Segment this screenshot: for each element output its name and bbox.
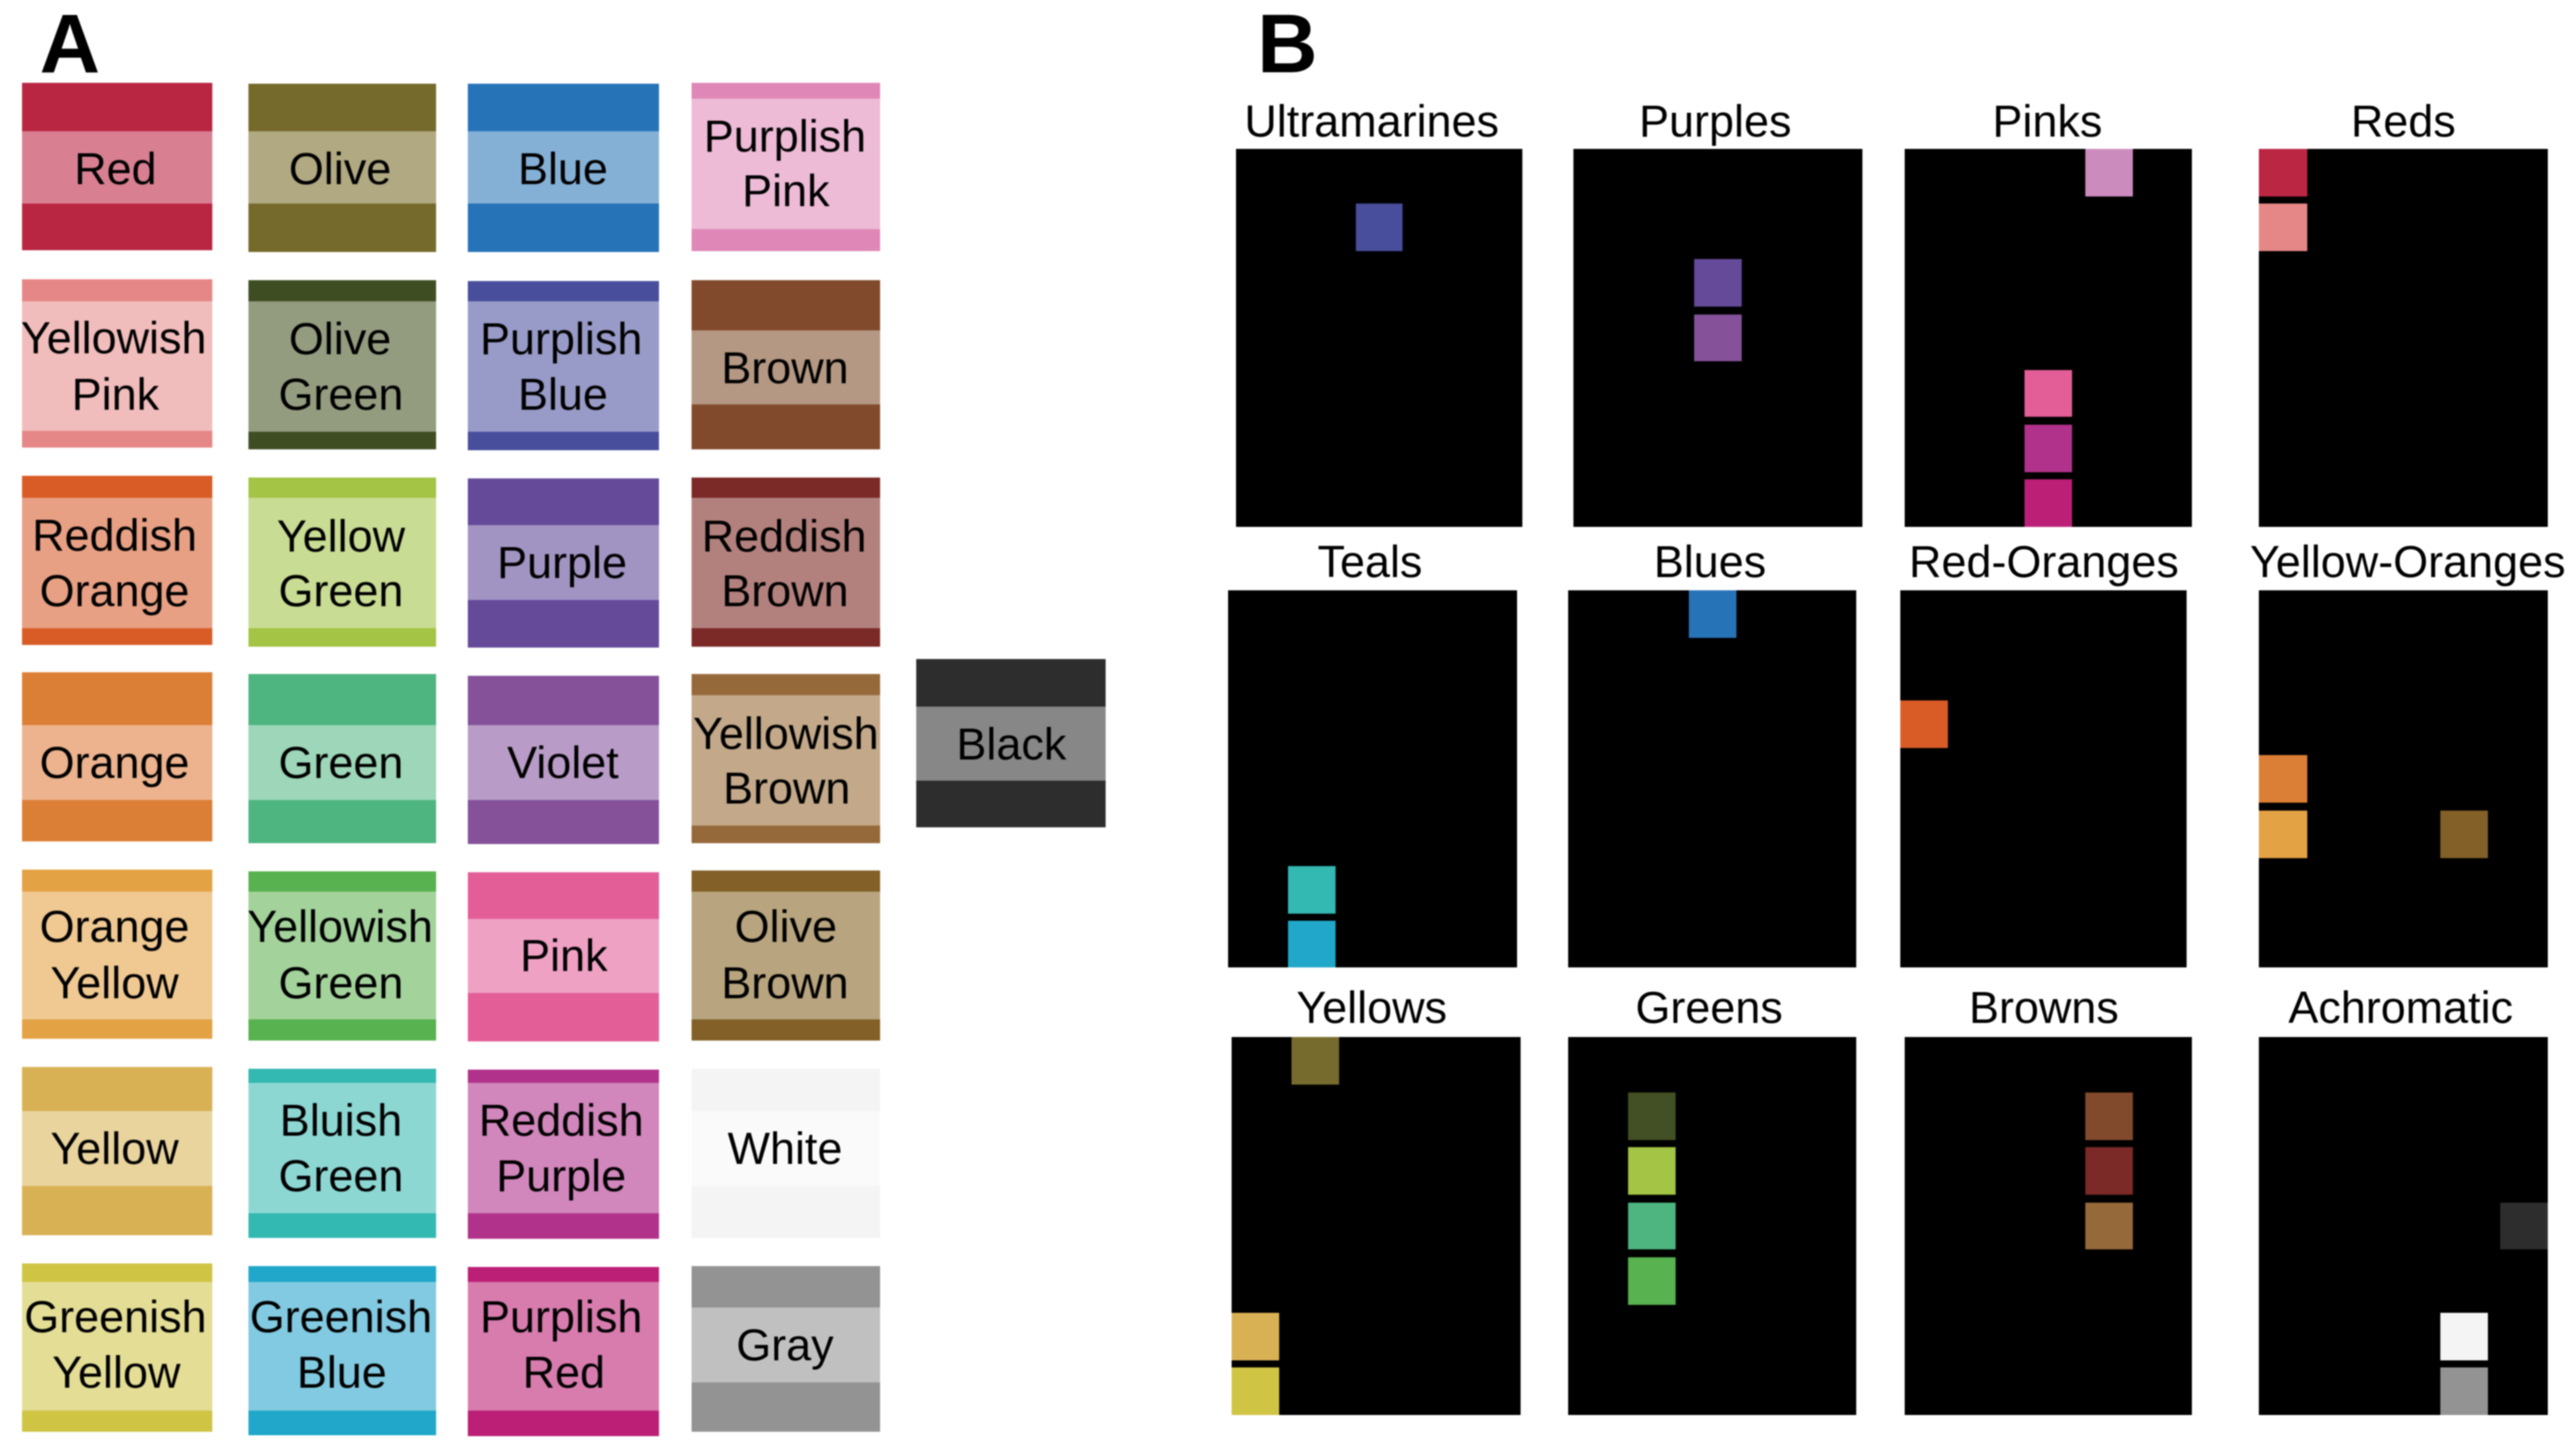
swatch: Bluish Green bbox=[248, 1069, 436, 1238]
map: Browns bbox=[1905, 982, 2192, 1415]
swatch: Green: Green bbox=[278, 737, 403, 788]
swatch: Yellow Green bbox=[248, 478, 436, 647]
swatch: Green bbox=[248, 674, 436, 843]
swatch: Black bbox=[916, 659, 1106, 827]
map: Browns: Browns bbox=[1969, 982, 2119, 1033]
swatch: Purplish Red bbox=[468, 1267, 659, 1436]
map: Teals bbox=[1228, 537, 1517, 967]
map: Purples bbox=[1573, 96, 1862, 527]
map: Yellow-Oranges: Yellow-Oranges bbox=[2250, 537, 2565, 587]
swatch: Purplish Blue: Blue bbox=[518, 369, 608, 419]
map: Blues bbox=[1568, 537, 1856, 967]
swatch: Reddish Orange bbox=[22, 476, 212, 645]
swatch: Yellow bbox=[22, 1067, 212, 1235]
map: Achromatic: Achromatic bbox=[2288, 982, 2513, 1033]
swatch: Yellowish Brown: Brown bbox=[723, 763, 850, 813]
map: Red-Oranges: Red-Oranges bbox=[1909, 537, 2179, 587]
swatch: White: White bbox=[728, 1123, 842, 1174]
swatch: Violet: Violet bbox=[507, 737, 618, 788]
swatch: Olive Brown bbox=[692, 870, 880, 1041]
swatch: Brown bbox=[692, 280, 880, 449]
swatch: Olive Brown: Olive bbox=[735, 901, 837, 952]
map: Ultramarines: Ultramarines bbox=[1244, 96, 1499, 146]
map: Reds bbox=[2259, 96, 2548, 527]
map: Red-Oranges bbox=[1900, 537, 2187, 967]
swatch: Reddish Brown: Brown bbox=[722, 566, 848, 616]
swatch: Gray: Gray bbox=[737, 1320, 834, 1370]
swatch: Purplish Red: Red bbox=[522, 1347, 605, 1397]
map: Yellows: Yellows bbox=[1296, 982, 1447, 1033]
swatch: Bluish Green: Green bbox=[278, 1151, 403, 1201]
swatch: Pink: Pink bbox=[520, 930, 608, 981]
swatch: Brown: Brown bbox=[722, 343, 848, 393]
map: Pinks bbox=[1905, 96, 2192, 527]
swatch: Orange Yellow: Orange bbox=[40, 901, 189, 952]
swatch: Yellowish Pink: Pink bbox=[71, 369, 159, 419]
map: Reds: Reds bbox=[2350, 96, 2456, 146]
swatch: Purplish Blue bbox=[468, 281, 659, 450]
heading: B: B bbox=[1257, 0, 1318, 91]
heading: A: A bbox=[40, 0, 100, 91]
map: Achromatic bbox=[2259, 982, 2548, 1415]
panel B: color category maps bbox=[1228, 0, 2565, 1415]
swatch: Bluish Green: Bluish bbox=[280, 1095, 402, 1145]
swatch: Olive bbox=[248, 84, 436, 252]
swatch: Red bbox=[22, 83, 212, 250]
swatch: Reddish Purple bbox=[468, 1070, 659, 1239]
map: Teals: Teals bbox=[1317, 537, 1423, 587]
swatch: Orange: Orange bbox=[40, 737, 189, 788]
swatch: Gray bbox=[692, 1266, 880, 1432]
swatch: Yellowish Pink: Yellowish bbox=[21, 313, 206, 363]
map: Blues: Blues bbox=[1654, 537, 1766, 587]
swatch: Olive Brown: Brown bbox=[722, 958, 848, 1008]
panel A: color swatches bbox=[21, 0, 1106, 1436]
swatch: Red: Red bbox=[74, 144, 157, 194]
map: Pinks: Pinks bbox=[1993, 96, 2102, 146]
swatch: Reddish Purple: Reddish bbox=[478, 1095, 644, 1145]
swatch: Blue bbox=[468, 84, 659, 252]
swatch: Yellowish Green: Green bbox=[278, 958, 403, 1008]
swatch: Purplish Pink: Purplish bbox=[704, 111, 866, 161]
swatch: Pink bbox=[468, 872, 659, 1041]
map: Yellow-Oranges bbox=[2250, 537, 2565, 967]
map: Greens bbox=[1568, 982, 1856, 1415]
swatch: Greenish Yellow: Yellow bbox=[52, 1347, 181, 1397]
swatch: Orange Yellow: Yellow bbox=[50, 958, 179, 1008]
swatch: Reddish Brown bbox=[692, 478, 880, 647]
swatch: Greenish Yellow bbox=[22, 1263, 212, 1432]
swatch: Purplish Red: Purplish bbox=[480, 1292, 642, 1342]
swatch: Reddish Purple: Purple bbox=[496, 1151, 626, 1201]
swatch: Greenish Yellow: Greenish bbox=[25, 1292, 206, 1342]
map: Yellows bbox=[1232, 982, 1521, 1415]
swatch: Blue: Blue bbox=[518, 144, 608, 194]
swatch: Yellowish Pink bbox=[21, 279, 212, 448]
swatch: Yellow Green: Green bbox=[278, 566, 403, 616]
swatch: Purplish Pink: Pink bbox=[742, 166, 830, 216]
swatch: White bbox=[692, 1069, 880, 1238]
swatch: Orange Yellow bbox=[22, 870, 212, 1039]
swatch: Greenish Blue: Blue bbox=[297, 1347, 387, 1397]
swatch: Violet bbox=[468, 676, 659, 844]
swatch: Reddish Orange: Orange bbox=[40, 566, 189, 616]
swatch: Yellowish Green bbox=[248, 871, 436, 1041]
swatch: Yellow Green: Yellow bbox=[277, 511, 405, 561]
map: Ultramarines bbox=[1236, 96, 1522, 527]
swatch: Olive Green: Olive bbox=[289, 314, 391, 364]
swatch: Purplish Blue: Purplish bbox=[480, 314, 642, 364]
map: Purples: Purples bbox=[1640, 96, 1791, 146]
swatch: Yellowish Brown bbox=[692, 674, 880, 843]
swatch: Greenish Blue bbox=[248, 1266, 436, 1435]
swatch: Greenish Blue: Greenish bbox=[250, 1292, 432, 1342]
swatch: Black: Black bbox=[957, 719, 1067, 769]
swatch: Olive: Olive bbox=[289, 144, 391, 194]
swatch: Yellowish Brown: Yellowish bbox=[693, 708, 878, 759]
swatch: Olive Green: Green bbox=[278, 369, 403, 419]
swatch: Reddish Brown: Reddish bbox=[701, 511, 867, 561]
swatch: Reddish Orange: Reddish bbox=[32, 510, 197, 560]
swatch: Purple bbox=[468, 478, 659, 648]
map: Greens: Greens bbox=[1635, 982, 1783, 1033]
swatch: Purple: Purple bbox=[497, 537, 627, 588]
swatch: Yellowish Green: Yellowish bbox=[248, 901, 433, 952]
swatch: Olive Green bbox=[248, 280, 436, 449]
swatch: Orange bbox=[22, 672, 212, 841]
swatch: Yellow: Yellow bbox=[50, 1123, 179, 1174]
swatch: Purplish Pink bbox=[692, 83, 880, 251]
